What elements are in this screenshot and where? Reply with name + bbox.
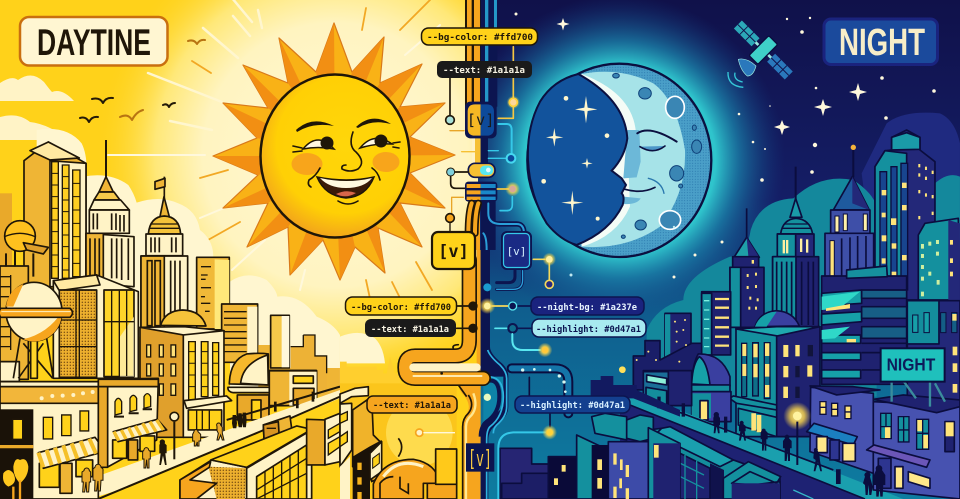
cyan wire and glowing yellow node	[498, 414, 557, 499]
billboard: NIGHT	[881, 348, 945, 407]
lower trunk	[475, 137, 481, 167]
small sphere water tank	[5, 221, 48, 277]
night clouds and city skyline	[620, 113, 960, 499]
blue [v] box	[502, 232, 531, 269]
upper right nodes below blue box	[497, 253, 556, 289]
blue [v] box: [v]	[507, 245, 526, 258]
domed tower	[773, 167, 819, 327]
observatory night	[678, 354, 731, 422]
label pill: --highlight cyan	[532, 319, 646, 337]
night lower centre scene	[498, 366, 680, 499]
label pill: --bg-color top	[422, 28, 538, 45]
daytime city skyline	[0, 129, 340, 499]
large water tower sphere	[0, 282, 72, 378]
spired tower	[86, 140, 134, 287]
night pedestrians	[657, 397, 885, 497]
serpentine orange pipe	[405, 260, 483, 378]
cream clouds behind buildings	[37, 129, 340, 390]
teal clouds	[647, 179, 877, 397]
left low block	[0, 266, 28, 382]
moon lit area	[582, 72, 685, 247]
title: NIGHT: NIGHT	[839, 22, 925, 64]
glowing node right of coil	[497, 182, 520, 211]
satellite signal arcs	[728, 72, 743, 87]
purple storefront	[867, 395, 960, 499]
label pill: --text top	[437, 61, 532, 78]
orange side of trunk	[458, 383, 481, 499]
street lamp glowing	[783, 402, 811, 465]
domed tower with flag	[141, 177, 188, 328]
birds	[80, 40, 205, 122]
right teal block	[918, 218, 960, 300]
small low night building	[643, 371, 692, 406]
navy patch behind bottom [v]	[466, 443, 494, 472]
label pill: --text lower	[365, 319, 456, 337]
mid right skyline	[222, 304, 340, 397]
purple cloud behind towers	[862, 113, 960, 263]
foreground building roof and face	[180, 426, 312, 499]
central lower circuit	[405, 250, 556, 499]
label pill: --highlight blue: --highlight: #0d47a1	[520, 400, 625, 411]
right side foreground building	[307, 413, 340, 465]
bottom [v] label: [v]	[468, 447, 492, 472]
daytime lower centre scene	[340, 333, 457, 499]
night foreground building	[620, 415, 781, 499]
capsule node	[468, 163, 495, 177]
label pill: --text orange	[367, 396, 457, 413]
moon	[527, 64, 711, 257]
big glass building	[53, 275, 138, 378]
street lamp	[170, 412, 179, 459]
striped building	[822, 266, 907, 384]
sun ray shading	[213, 23, 455, 280]
title: NIGHT	[824, 19, 938, 64]
small sky glints on right	[570, 226, 675, 276]
tall teal tower	[875, 130, 935, 300]
satellite dish	[738, 59, 756, 76]
label pill: --night-bg: --night-bg: #1a237e	[537, 302, 638, 313]
satellite	[728, 15, 799, 87]
coil connector	[465, 182, 497, 202]
sun left eye	[303, 136, 334, 150]
teal node upper left	[446, 77, 475, 152]
title: DAYTINE	[20, 17, 168, 66]
sun mouth	[317, 177, 374, 198]
slab building	[197, 257, 229, 329]
night sidewalk	[620, 387, 903, 499]
far left block	[0, 193, 12, 270]
delivery truck	[263, 416, 292, 438]
sun	[213, 23, 455, 280]
navy trunk	[481, 250, 508, 499]
moon face profile shading	[623, 130, 641, 204]
moon craters	[613, 73, 702, 238]
night street	[620, 405, 865, 499]
yellow wire and node upper right	[498, 47, 520, 118]
billboard: NIGHT: NIGHT	[887, 355, 936, 375]
sidewalk	[33, 390, 340, 499]
label pill: --night-bg	[531, 297, 644, 315]
road surface	[97, 398, 340, 499]
central circuit trunk	[446, 0, 524, 250]
dome centre building	[729, 311, 820, 437]
dotted navy buildings	[633, 313, 702, 390]
sun light rays	[108, 0, 440, 308]
pyramid roof tower	[825, 145, 874, 283]
cream cloud behind lower skyline	[340, 333, 385, 363]
observatory	[228, 353, 282, 420]
glowing node and wire left	[416, 429, 455, 436]
daytime sky background	[0, 0, 478, 499]
label pill: --bg-color lower	[346, 297, 456, 315]
label pill: --text orange: --text: #1a1a1a	[373, 401, 451, 411]
center office building	[140, 310, 232, 437]
moon dark side	[528, 74, 627, 245]
moon disc outer band	[527, 64, 711, 257]
blue storefront	[807, 386, 880, 473]
blue pipes to blue box	[446, 197, 524, 250]
big yellow [v] box: [v]	[438, 242, 469, 262]
label pill: --text lower: --text: #1a1a1a	[371, 325, 449, 335]
small low building	[269, 371, 317, 406]
small teal wall and distant houses	[591, 366, 680, 417]
shop building left	[0, 382, 105, 499]
label pill: --bg-color top: --bg-color: #ffd700	[427, 33, 533, 43]
night sky background	[478, 0, 960, 499]
trunk backgrounds	[465, 0, 481, 107]
split [v] box	[465, 102, 497, 138]
big yellow [v] box	[432, 232, 475, 269]
night stars	[514, 12, 936, 278]
blue circuit arc	[512, 368, 568, 413]
left teal node wiring	[447, 168, 468, 188]
moon white edge crescent	[577, 74, 636, 247]
tall tower left	[24, 142, 86, 287]
sun rays	[213, 23, 455, 280]
distant glowing light	[620, 367, 626, 373]
sun face disc	[260, 74, 410, 238]
label pill: --bg-color lower: --bg-color: #ffd700	[351, 303, 451, 313]
clouds top left	[0, 75, 74, 140]
shop building with arched windows	[98, 378, 167, 467]
label pill: --text top: --text: #1a1a1a	[443, 66, 525, 76]
cyan wire and ring node	[488, 124, 515, 163]
spired navy tower	[730, 208, 764, 327]
foreground buildings	[340, 387, 457, 499]
satellite panels and body	[728, 15, 799, 85]
lower centre navy buildings	[500, 413, 680, 499]
sun right eye	[360, 134, 392, 148]
pedestrians	[82, 423, 224, 492]
title: DAYTINE: DAYTINE	[37, 22, 151, 63]
moon stars	[541, 96, 609, 221]
label pill: --highlight blue	[515, 396, 630, 413]
wires from left pills to trunk	[457, 301, 478, 333]
right lower navy tower with windows	[907, 301, 960, 404]
split [v] box: [v]	[467, 111, 494, 129]
glowing node on trunk	[479, 298, 495, 314]
label pill: --highlight cyan: --highlight: #0d47a1	[536, 324, 641, 335]
sun nose and smile lines	[293, 132, 400, 204]
teal striped slab	[702, 292, 731, 355]
moon eye and brow	[625, 131, 677, 193]
sun brows	[296, 119, 391, 132]
sun cheeks	[292, 152, 400, 175]
distant yellow skyline	[340, 357, 413, 393]
wires to right pills	[492, 302, 552, 357]
